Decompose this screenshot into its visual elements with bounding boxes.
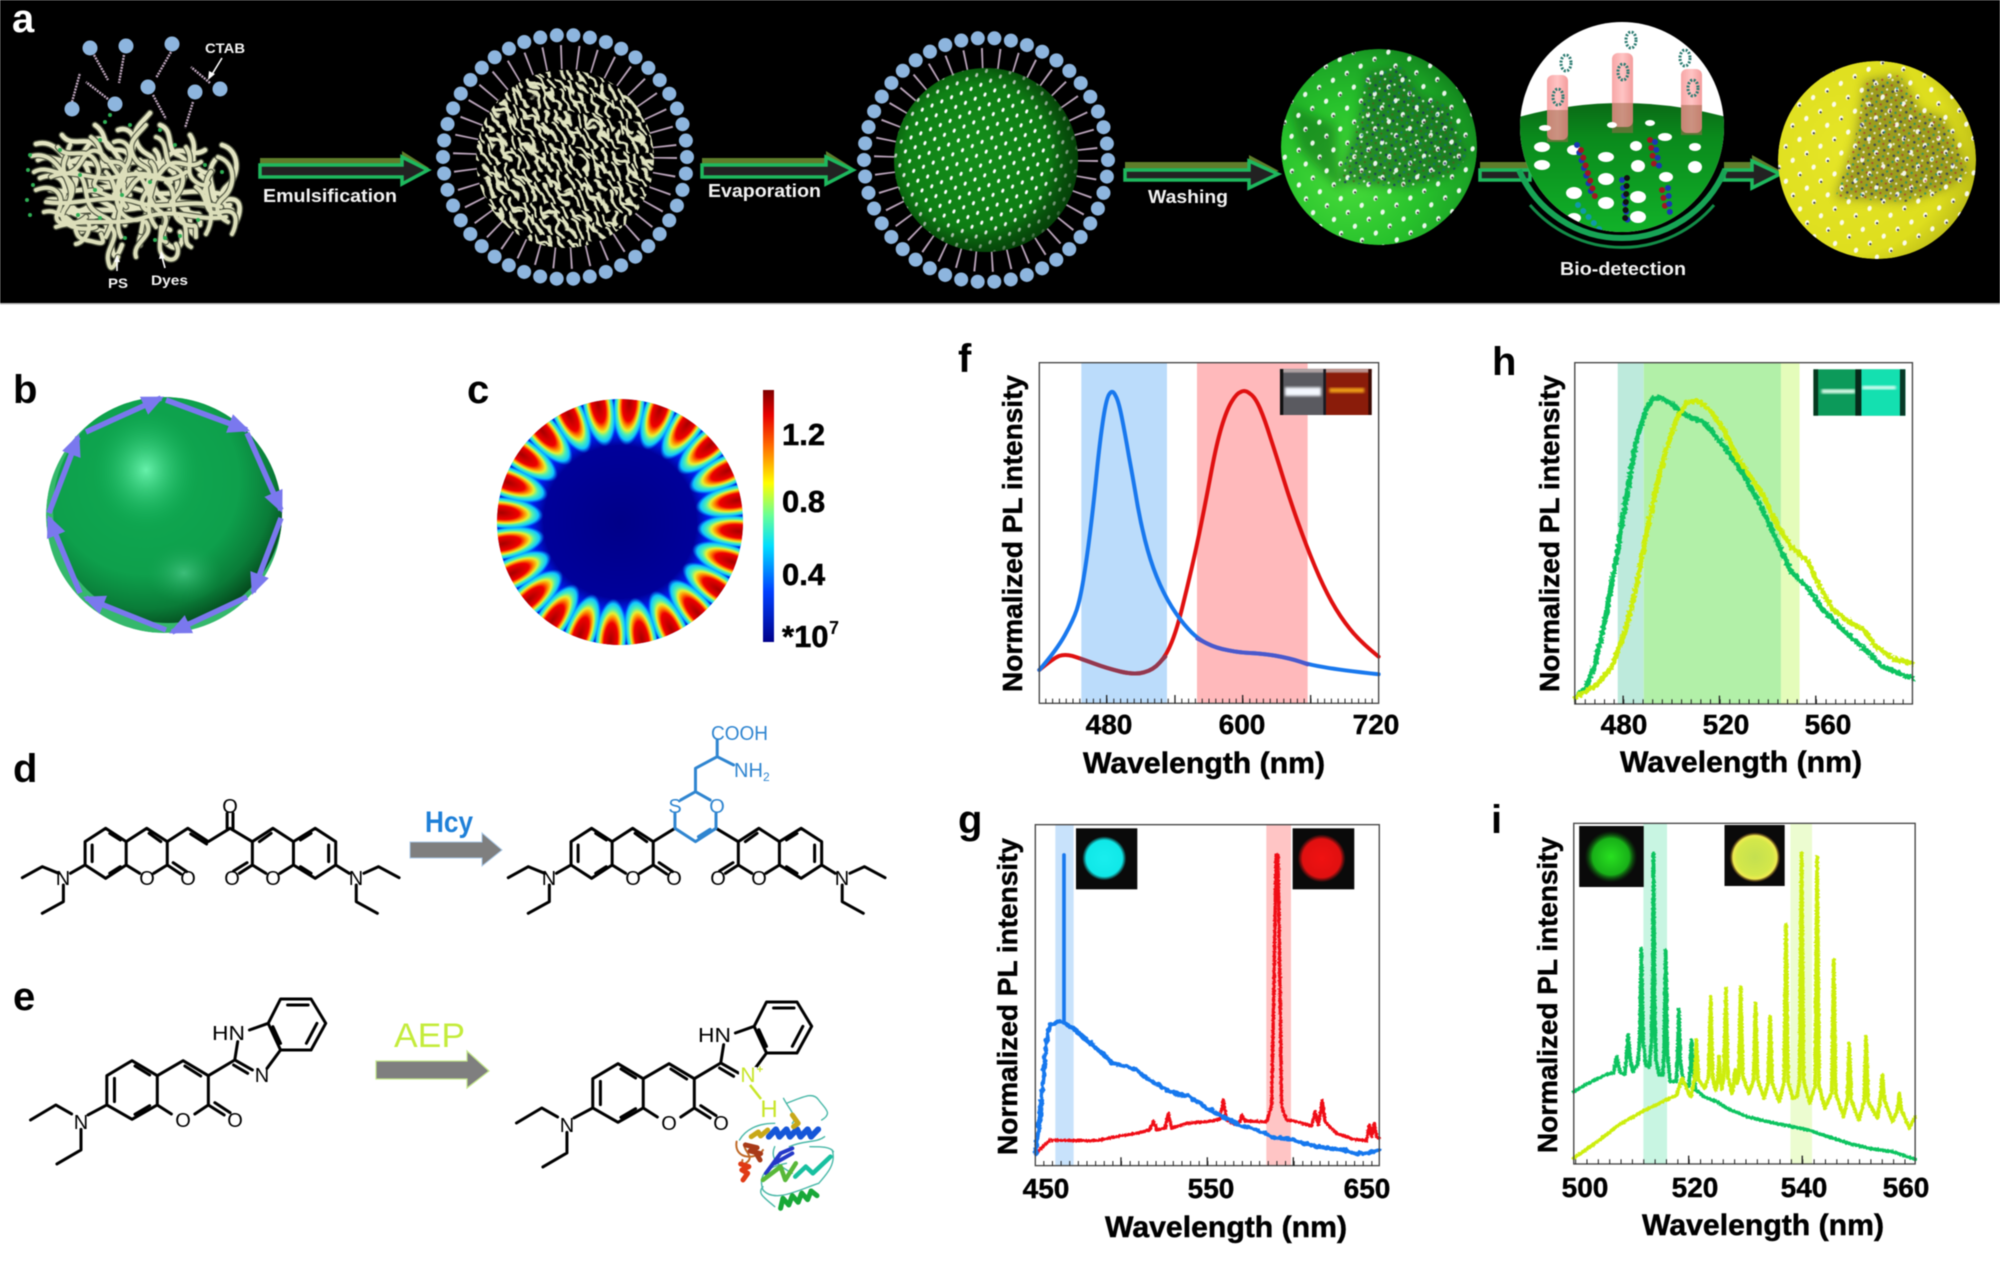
tick labels h: 560	[1805, 709, 1851, 740]
panel a: fabrication workflow on black	[0, 0, 2000, 304]
shaded bands i	[1643, 823, 1812, 1164]
bound product molecule: O	[661, 1113, 677, 1135]
AEP reaction arrow	[376, 1017, 489, 1088]
plot h	[1575, 363, 1912, 704]
tick labels f: 480	[1086, 709, 1132, 740]
field disk with 24 lobes	[496, 398, 744, 646]
product molecule: O	[709, 796, 725, 818]
product molecule	[508, 723, 885, 913]
label b: b	[13, 368, 37, 412]
inset red microsphere image	[1293, 828, 1354, 889]
colour bar with labels: 0.4	[782, 557, 826, 592]
probe molecule	[31, 999, 326, 1164]
panel e: AEP reaction	[13, 975, 833, 1208]
shaded bands f	[1081, 363, 1308, 703]
yellow lasing spectrum i	[1574, 853, 1915, 1158]
reactant molecule: N	[349, 868, 363, 890]
reactant molecule: O	[139, 868, 155, 890]
Hcy reaction arrow	[410, 806, 502, 866]
red spectrum f	[1039, 391, 1379, 673]
label c: c	[467, 368, 489, 412]
chart g: blue and red lasing spectra	[958, 798, 1390, 1244]
colour bar with labels: *10	[782, 619, 829, 654]
arrow: washing: Washing	[1148, 187, 1228, 207]
label i: i	[1491, 798, 1502, 842]
green porous sphere with dyes	[1280, 48, 1480, 248]
bio-detection zoomed sphere: Bio-detection	[1560, 259, 1686, 279]
label g: g	[958, 798, 982, 842]
plot f	[1039, 363, 1379, 703]
green lasing spectrum i	[1574, 853, 1915, 1159]
inset cyan microsphere image	[1076, 828, 1137, 889]
product molecule: N	[835, 868, 849, 890]
bound product molecule: N	[740, 1064, 756, 1087]
plot g	[1035, 825, 1379, 1166]
protein ribbon	[736, 1096, 833, 1208]
CTAB label and arrow	[205, 40, 245, 80]
AEP reaction arrow: AEP	[394, 1017, 465, 1055]
arrow: evaporation	[702, 151, 853, 201]
probe molecule: HN	[212, 1023, 245, 1045]
y axis title f: Normalized PL intensity	[997, 375, 1028, 692]
probe molecule: N	[255, 1065, 269, 1087]
tick labels h	[1601, 709, 1851, 740]
probe molecule: O	[175, 1110, 191, 1132]
tick labels g	[1023, 1173, 1390, 1204]
arrow: washing	[1125, 155, 1279, 207]
x axis title h: Wavelength (nm)	[1620, 746, 1862, 779]
chart h: green and yellow solution spectra	[1492, 340, 1912, 779]
chart i: green and yellow lasing spectra	[1491, 798, 1929, 1242]
reactant molecule: O	[180, 868, 196, 890]
product molecule: 2	[763, 770, 770, 784]
product molecule: O	[625, 868, 641, 890]
y axis title g: Normalized PL intensity	[992, 838, 1023, 1155]
product molecule: O	[710, 868, 726, 890]
Hcy reaction arrow: Hcy	[425, 806, 473, 839]
probe molecule: N	[74, 1112, 88, 1134]
y axis title i: Normalized PL intensity	[1532, 837, 1563, 1153]
x axis title i: Wavelength (nm)	[1642, 1209, 1884, 1242]
inset cuvette photo h	[1813, 369, 1905, 416]
tick labels i: 560	[1883, 1172, 1929, 1203]
Dyes label: Dyes	[151, 272, 188, 288]
arrow: emulsification	[260, 151, 429, 206]
product molecule: O	[666, 868, 682, 890]
bound product molecule: O	[713, 1113, 729, 1135]
inset cuvette photo f	[1280, 369, 1372, 415]
bound product molecule: HN	[698, 1025, 731, 1047]
product molecule: S	[668, 796, 682, 818]
inset green microsphere image	[1579, 826, 1644, 887]
shaded bands h	[1618, 363, 1800, 704]
tick labels g: 450	[1023, 1173, 1069, 1204]
reactant molecule: O	[224, 868, 240, 890]
blue spectrum f	[1039, 392, 1379, 674]
bound product molecule: N	[560, 1115, 574, 1137]
yellow spectrum h	[1575, 400, 1912, 698]
x axis title f: Wavelength (nm)	[1083, 747, 1325, 780]
CTAB surfactant molecules	[64, 36, 228, 128]
arrow: evaporation: Evaporation	[708, 181, 821, 201]
label d: d	[13, 747, 37, 791]
arrow: emulsification: Emulsification	[263, 186, 397, 206]
bound product molecule	[516, 1002, 812, 1167]
reactant molecule: N	[56, 868, 70, 890]
axes and ticks i	[1574, 823, 1915, 1164]
tick labels g: 650	[1344, 1173, 1390, 1204]
tick labels i: 540	[1781, 1172, 1827, 1203]
green spectrum h	[1575, 398, 1912, 698]
product molecule: COOH	[711, 723, 768, 745]
tick labels f: 600	[1219, 709, 1265, 740]
panel c: electric field distribution	[468, 380, 839, 648]
label e: e	[13, 975, 35, 1019]
shaded bands g	[1055, 825, 1291, 1166]
ray path arrows	[49, 398, 281, 632]
bio-detection zoomed sphere	[1515, 18, 1730, 279]
yellow sphere after detection	[1778, 60, 1978, 260]
tick labels i: 520	[1672, 1172, 1718, 1203]
tick labels h: 520	[1703, 709, 1749, 740]
colour bar with labels: 7	[829, 618, 839, 638]
product molecule: NH	[734, 760, 763, 782]
emulsion droplet with surfactant shell	[443, 35, 687, 279]
axes and ticks f	[1039, 363, 1379, 703]
PS label: PS	[108, 275, 128, 291]
bound product molecule: H	[760, 1096, 778, 1123]
colour bar with labels: 0.8	[782, 484, 825, 519]
product molecule: N	[542, 868, 556, 890]
inset yellow microsphere image	[1725, 825, 1785, 886]
chart f: blue and red solution spectra	[958, 337, 1399, 780]
blue lasing spectrum g	[1035, 855, 1379, 1154]
polystyrene coils with dyes	[27, 113, 240, 268]
CTAB label and arrow: CTAB	[205, 40, 245, 56]
tick labels i: 500	[1562, 1172, 1608, 1203]
label f: f	[958, 337, 972, 381]
reactant molecule: O	[222, 796, 238, 818]
panel d: Hcy reaction	[13, 723, 885, 913]
red lasing spectrum g	[1035, 855, 1379, 1154]
PS label	[108, 255, 128, 291]
colour bar with labels	[763, 390, 839, 654]
reactant molecule: O	[265, 868, 281, 890]
y axis title h: Normalized PL intensity	[1534, 375, 1565, 692]
product molecule: O	[751, 868, 767, 890]
axes and ticks g	[1035, 825, 1379, 1166]
green sphere	[46, 393, 283, 633]
overlap tints f	[1081, 639, 1308, 673]
x axis title g: Wavelength (nm)	[1105, 1211, 1347, 1244]
tick labels f	[1086, 709, 1399, 740]
reactant molecule	[22, 796, 399, 913]
tick labels h: 480	[1601, 709, 1647, 740]
arrow: to bio-detection (left and right stubs)	[1480, 155, 1781, 188]
porous sphere with surfactant shell	[864, 38, 1108, 282]
probe molecule: O	[227, 1110, 243, 1132]
panel b: whispering gallery sphere	[13, 368, 283, 633]
label h: h	[1492, 340, 1516, 384]
colour bar with labels: 1.2	[782, 417, 825, 452]
tick labels i	[1562, 1172, 1929, 1203]
tick labels f: 720	[1353, 709, 1399, 740]
plot i	[1574, 823, 1915, 1164]
axes and ticks h	[1575, 363, 1912, 704]
Dyes label	[151, 251, 188, 288]
tick labels g: 550	[1188, 1173, 1234, 1204]
bound product molecule: +	[757, 1064, 763, 1076]
